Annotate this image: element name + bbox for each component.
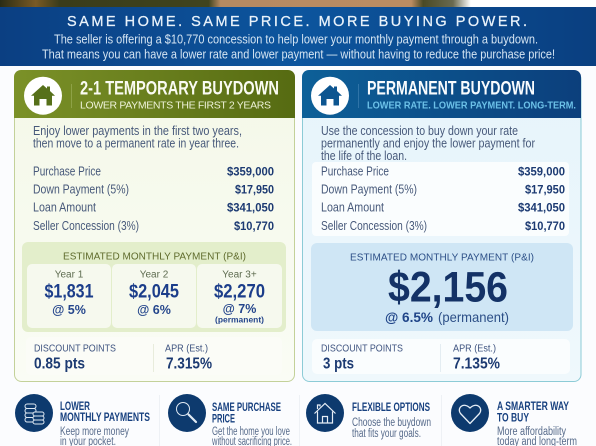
year 2: @ 6% [137,303,171,317]
benefit: a smarter way to buy: A SMARTER WAY [497,401,569,413]
benefit: lower monthly payments: LOWER [60,401,90,413]
year 2: $2,045 [129,282,179,303]
left points and APR: 7.315% [166,355,212,372]
left loan details: Purchase Price [33,165,101,179]
benefit: flexible options: FLEXIBLE OPTIONS [352,402,430,414]
right points and APR: 7.135% [453,355,500,372]
left loan details [33,165,274,233]
right loan details: $17,950 [525,183,565,197]
benefit: lower monthly payments: Keep more money [60,426,129,438]
year 3+: @ 7% [223,302,256,316]
right description: the life of the loan. [321,149,407,163]
benefit: a smarter way to buy: More affordability [497,426,566,438]
right panel header: PERMANENT BUYDOWN [367,78,535,100]
left loan details: $359,000 [227,165,274,179]
right points and APR: DISCOUNT POINTS [321,344,403,355]
right estimated payment [311,243,573,331]
left loan details: $17,950 [235,183,274,197]
header banner [0,7,596,66]
year 2: Year 2 [140,270,169,281]
icon: magnifier [176,402,196,422]
benefit: lower monthly payments: MONTHLY PAYMENTS [60,412,150,424]
left description: Enjoy lower payments in the first two years, [33,124,242,138]
left panel header: 2-1 TEMPORARY BUYDOWN [80,78,279,100]
left panel header [14,70,295,118]
headline: SAME HOME. SAME PRICE. MORE BUYING POWER. [67,14,527,30]
panel: permanent buydown [302,70,581,382]
right estimated payment: ESTIMATED MONTHLY PAYMENT (P&I) [350,252,534,263]
left loan details: Down Payment (5%) [33,183,129,197]
year 1 [27,264,111,328]
benefit: flexible options [306,394,431,440]
benefit: same purchase price: PRICE [212,414,235,426]
year 3+: Year 3+ [222,270,257,281]
benefit: flexible options: Choose the buydown [352,417,431,429]
left points and APR: DISCOUNT POINTS [34,344,116,355]
right loan details: $10,770 [525,219,565,233]
left loan details: Seller Concession (3%) [33,219,139,233]
left points and APR: APR (Est.) [165,344,208,355]
left panel header: LOWER PAYMENTS THE FIRST 2 YEARS [80,100,271,112]
year 2 [112,264,196,328]
benefit: same purchase price: SAME PURCHASE [212,402,281,414]
icon: heart [459,405,481,424]
right loan details: Purchase Price [321,165,389,179]
right points and APR: APR (Est.) [453,344,496,355]
right description: Use the concession to buy down your rate [321,124,518,138]
left points and APR: 0.85 pts [34,355,85,372]
left estimated payment: ESTIMATED MONTHLY PAYMENT (P&I) [63,252,246,262]
right estimated payment: @ 6.5% [385,309,434,325]
panel: 2-1 temporary buydown [14,70,295,382]
left description [33,124,242,151]
hero photo strip [0,0,596,7]
year 3+ [197,264,282,328]
left estimated payment [22,242,286,332]
year 1: Year 1 [55,270,84,281]
left points and APR [26,337,282,375]
right estimated payment: (permanent) [438,309,509,325]
right points and APR: 3 pts [323,355,354,372]
intro text [42,32,555,62]
right description [321,124,535,163]
benefit: a smarter way to buy: TO BUY [497,412,529,424]
left loan details: $10,770 [234,219,274,233]
right loan details: $359,000 [518,165,565,179]
year 1: @ 5% [52,303,86,317]
right estimated payment: $2,156 [388,264,508,312]
year 3+: (permanent) [215,315,264,325]
right panel header [302,70,581,118]
icon: coins [25,404,44,424]
benefit: lower monthly payments [15,394,150,446]
left loan details: Loan Amount [33,201,96,215]
benefit: same purchase price [168,394,292,446]
benefit: a smarter way to buy [451,394,577,446]
benefit: same purchase price: Get the home you love [212,426,290,438]
icon: house [314,404,336,423]
right loan details [312,162,569,236]
right loan details: $341,050 [518,201,565,215]
left loan details: $341,050 [227,201,274,215]
right loan details: Seller Concession (3%) [321,219,427,233]
right loan details: Loan Amount [321,201,384,215]
left description: then move to a permanent rate in year three. [33,137,239,151]
year 3+: $2,270 [214,282,265,303]
right points and APR [312,339,570,374]
right description: permanently and enjoy the lower payment for [321,137,535,151]
benefit: flexible options: that fits your goals. [352,428,421,440]
right loan details: Down Payment (5%) [321,183,417,197]
year 1: $1,831 [44,282,94,303]
